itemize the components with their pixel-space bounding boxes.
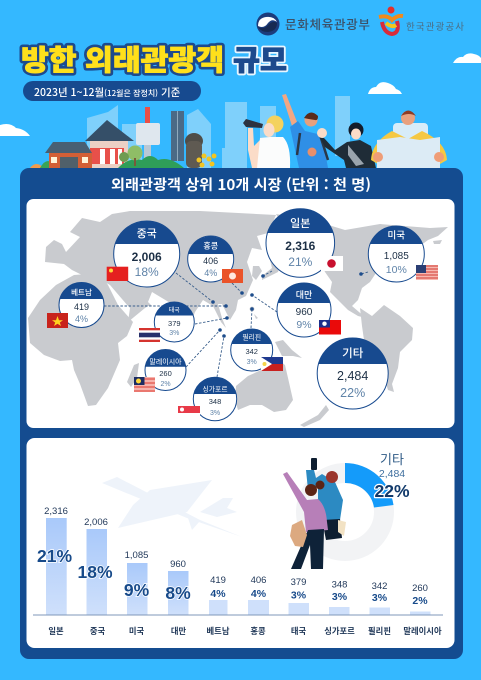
logo: ministry of culture: 문화체육관광부 xyxy=(285,14,370,33)
circle: usa xyxy=(368,226,424,282)
circle: china xyxy=(114,221,180,287)
circle: thailand: 379 xyxy=(168,319,181,328)
panel: bar chart xyxy=(26,438,454,648)
circle: china: 2,006 xyxy=(132,250,162,264)
landmarks: palace, tower, statue xyxy=(30,107,216,168)
circle: china: 18% xyxy=(135,265,159,279)
circle: japan: 일본 xyxy=(290,215,310,231)
circle: malaysia: 2% xyxy=(160,381,171,388)
circle: philippines xyxy=(231,329,273,371)
circle: thailand xyxy=(154,302,194,342)
circle: others: 2,484 xyxy=(337,369,368,383)
bar percentages: 2% xyxy=(412,595,428,607)
bar values: 348 xyxy=(332,580,347,590)
bar labels: 말레이시아 xyxy=(403,625,442,637)
circle: malaysia: 말레이시아 xyxy=(149,357,182,367)
bar labels: 베트남 xyxy=(207,625,230,637)
logo: korea tourism organization xyxy=(379,6,464,34)
flag: japan xyxy=(321,256,343,271)
circle: others: 22% xyxy=(340,386,365,400)
stone statue xyxy=(185,133,203,168)
yellow flowers xyxy=(196,154,216,168)
circle: japan: 2,316 xyxy=(285,239,316,253)
skyscraper xyxy=(171,111,184,161)
flag: taiwan xyxy=(319,320,341,334)
travelers xyxy=(243,94,447,168)
logo: ministry of culture xyxy=(256,12,370,36)
bar values: 419 xyxy=(210,575,226,586)
bar percentages: 4% xyxy=(251,588,267,600)
title: 방한 외래관광객 xyxy=(21,38,224,79)
circle: singapore: 3% xyxy=(210,410,220,417)
donut chart xyxy=(306,463,394,551)
circle: malaysia: 260 xyxy=(159,369,172,378)
circle: taiwan: 960 xyxy=(296,307,313,318)
bar values: 406 xyxy=(251,575,266,586)
bar percentages: 8% xyxy=(165,583,191,603)
title: 방한 외래관광객 xyxy=(21,38,224,79)
bar percentages: 9% xyxy=(124,580,150,600)
circle: vietnam: 419 xyxy=(74,302,89,312)
bar percentages: 21% xyxy=(37,546,72,566)
bar labels: 싱가포르 xyxy=(324,625,355,637)
bar labels: 홍콩 xyxy=(250,625,266,637)
palace hall xyxy=(45,120,134,168)
donut label: others: 기타 xyxy=(380,449,404,468)
circle: vietnam: 4% xyxy=(75,314,88,324)
circle: vietnam: 베트남 xyxy=(71,287,92,298)
bar labels: 대만 xyxy=(171,625,186,637)
bar labels: 태국 xyxy=(291,625,306,637)
bar labels: 미국 xyxy=(129,625,144,637)
circle: singapore: 348 xyxy=(209,397,221,406)
bar values xyxy=(44,506,428,594)
bar values: 379 xyxy=(291,577,306,588)
bar percentages: 3% xyxy=(332,591,348,603)
circle: japan xyxy=(266,209,335,277)
circle: thailand: 태국 xyxy=(169,305,180,314)
bar values: 2,316 xyxy=(44,506,68,517)
map landmasses xyxy=(28,211,448,427)
circle: china: 중국 xyxy=(137,225,157,241)
circle: vietnam xyxy=(59,282,104,328)
flag: philippines xyxy=(261,357,283,371)
flag: china xyxy=(107,267,128,281)
bar labels xyxy=(48,625,442,637)
title: 규모 xyxy=(233,38,287,79)
donut label: others: 22% xyxy=(374,481,410,501)
circle: singapore: 싱가포르 xyxy=(202,384,228,394)
bar values: 2,006 xyxy=(84,517,108,528)
clouds xyxy=(0,53,481,136)
title: 규모 xyxy=(233,38,287,79)
seoul tower xyxy=(136,107,160,160)
skyline xyxy=(87,96,350,168)
circle: usa: 10% xyxy=(386,264,407,276)
circle: japan: 21% xyxy=(288,255,313,269)
flag: malaysia xyxy=(134,377,155,392)
circle: others: 기타 xyxy=(342,345,364,361)
bar values: 960 xyxy=(170,559,186,570)
woman in purple xyxy=(283,472,328,569)
location dots xyxy=(211,272,363,338)
donut label: others xyxy=(374,449,410,501)
date pill: 2023년 1~12월(12월은 잠정치) 기준 xyxy=(34,85,181,100)
flag: hong kong xyxy=(222,269,243,283)
circle: singapore xyxy=(193,377,237,421)
circle: others xyxy=(317,338,388,409)
bar labels: 필리핀 xyxy=(368,625,391,637)
bar percentages: 3% xyxy=(372,592,388,604)
bar values: 260 xyxy=(412,583,428,594)
circle: usa: 미국 xyxy=(388,228,405,242)
connector lines xyxy=(104,271,368,377)
airplane watermark xyxy=(102,477,242,537)
circle: taiwan: 9% xyxy=(296,319,312,331)
circle: hong kong: 홍콩 xyxy=(203,240,218,252)
flag: thailand xyxy=(139,328,160,342)
logo: korea tourism organization: 한국관광공사 xyxy=(406,19,464,33)
flag: vietnam xyxy=(47,313,68,328)
traveler in black xyxy=(317,122,376,168)
bar percentages: 3% xyxy=(291,590,307,602)
panel: world map xyxy=(26,199,454,428)
traveler with binoculars xyxy=(243,116,290,168)
traveler in blue xyxy=(282,94,328,168)
circle: hong kong xyxy=(188,236,234,282)
bar percentages xyxy=(37,546,428,607)
flag: usa xyxy=(416,265,438,280)
donut label: others: 2,484 xyxy=(379,468,405,480)
circle: thailand: 3% xyxy=(169,330,179,337)
circle: taiwan xyxy=(277,283,331,337)
bar labels: 중국 xyxy=(90,625,105,637)
panel heading: 외래관광객 상위 10개 시장 (단위 : 천 명) xyxy=(111,174,371,195)
circle: taiwan: 대만 xyxy=(296,288,312,301)
bar labels: 일본 xyxy=(48,625,64,637)
date pill xyxy=(23,81,201,101)
circle: hong kong: 406 xyxy=(203,256,218,266)
trees xyxy=(118,146,184,168)
circle: philippines: 3% xyxy=(247,359,257,366)
circle: hong kong: 4% xyxy=(204,268,217,278)
bar percentages: 18% xyxy=(77,562,113,582)
bar values: 1,085 xyxy=(125,550,148,561)
bar percentages: 4% xyxy=(210,588,226,600)
traveler with map xyxy=(371,110,447,168)
flag: singapore xyxy=(178,406,200,420)
circle: philippines: 342 xyxy=(245,347,258,356)
circle: philippines: 필리핀 xyxy=(242,332,261,342)
circle: usa: 1,085 xyxy=(384,251,409,262)
tourists photographing xyxy=(283,458,346,569)
man in blue xyxy=(306,458,346,540)
circle: malaysia xyxy=(145,350,186,390)
bar values: 342 xyxy=(372,581,387,592)
